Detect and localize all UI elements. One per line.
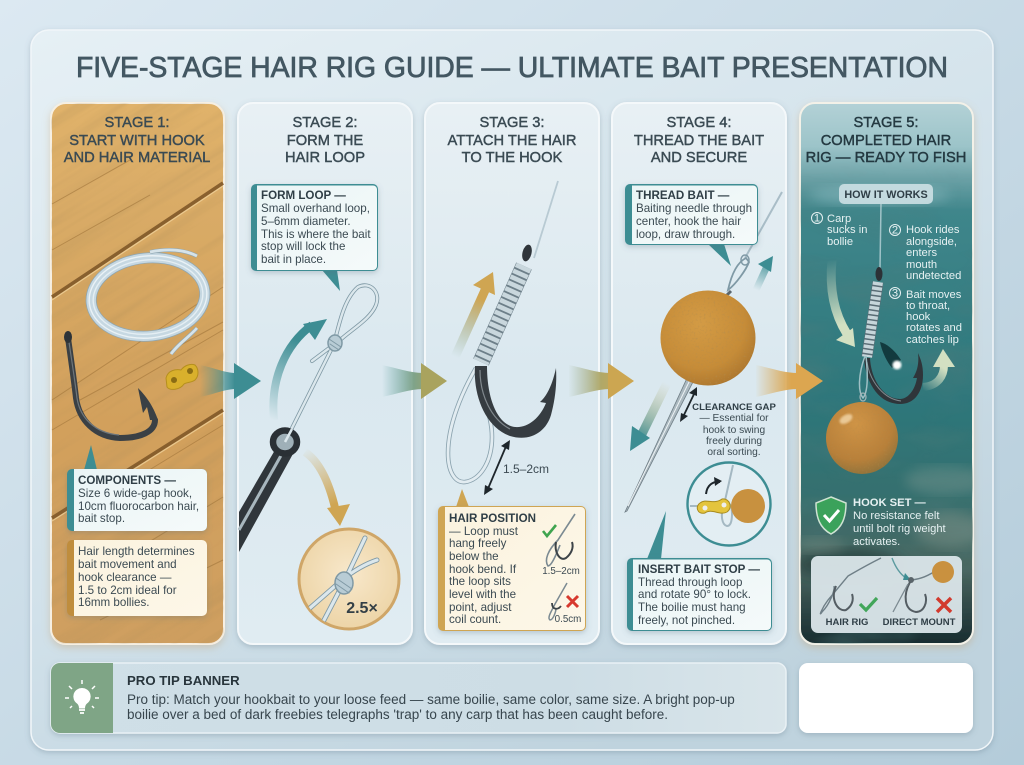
callout: hair position: HAIR POSITION xyxy=(449,512,536,525)
callout: insert bait stop: The boilie must hang xyxy=(638,601,746,614)
measurement: 1.5–2cm xyxy=(484,440,549,495)
title: FIVE-STAGE HAIR RIG GUIDE — ULTIMATE BAIT PRESENTATION xyxy=(76,52,948,84)
icon: fluorocarbon coil xyxy=(85,250,211,354)
blank white box xyxy=(799,663,973,733)
icon: hook shank xyxy=(239,450,294,552)
heading: START WITH HOOK xyxy=(69,133,205,149)
arrow: gold up xyxy=(455,272,495,357)
callout: hair position: hang freely xyxy=(449,537,507,550)
step 3: 3 xyxy=(892,288,898,300)
icon: hair with overhand loop xyxy=(285,285,377,442)
hair with boilie xyxy=(826,356,898,474)
tip text: Pro tip: Match your hookbait to your loose feed — same boilie, same color, same size. A bright pop-up xyxy=(127,692,735,707)
text: hook set: HOOK SET — xyxy=(853,497,927,509)
inset: bait stop detail xyxy=(688,462,770,546)
callout: thread bait: THREAD BAIT — xyxy=(636,189,730,202)
step 3 xyxy=(890,288,962,346)
step 2 xyxy=(890,224,961,282)
step 2: Hook rides xyxy=(906,224,960,236)
note: hair length: 16mm bollies. xyxy=(78,596,150,609)
panel: stage 4 xyxy=(612,103,786,644)
callout: hair position xyxy=(438,489,586,631)
icon: hook xyxy=(64,331,158,438)
heading: STAGE 1: xyxy=(104,115,170,131)
callout: thread bait: center, hook the hair xyxy=(636,215,741,228)
text: hook set: activates. xyxy=(853,536,900,548)
boilie xyxy=(660,290,756,386)
heading: STAGE 4: xyxy=(666,115,732,131)
callout: insert bait stop: Thread through loop xyxy=(638,576,742,589)
text: clearance gap: hook to swing xyxy=(703,425,765,436)
text: clearance gap: CLEARANCE GAP xyxy=(692,402,776,413)
label: how it works xyxy=(839,184,933,204)
callout: form loop: FORM LOOP — xyxy=(261,189,346,202)
callout: insert bait stop xyxy=(627,511,772,631)
icon: rigged hook xyxy=(864,267,923,404)
callout: hair position: coil count. xyxy=(449,613,501,626)
arrow: gold curve xyxy=(305,452,350,526)
heading: AND SECURE xyxy=(651,150,747,166)
arrow: pale right xyxy=(923,349,955,387)
comparison: hair rig xyxy=(820,558,881,628)
text: clearance gap: oral sorting. xyxy=(707,447,761,458)
heading: AND HAIR MATERIAL xyxy=(64,150,210,166)
icon: carp mouth glint xyxy=(880,342,902,370)
arrow: teal up xyxy=(756,256,773,290)
step 2: 2 xyxy=(892,224,898,236)
callout: hair position: point, adjust xyxy=(449,601,512,614)
text: clearance gap: freely during xyxy=(706,436,762,447)
callout: components: Size 6 wide-gap hook, xyxy=(78,487,192,500)
callout: components xyxy=(67,445,207,531)
callout: thread bait: Baiting needle through xyxy=(636,202,752,215)
icon: hook eye xyxy=(273,429,297,454)
step 1 xyxy=(812,212,867,248)
callout: components: COMPONENTS — xyxy=(78,474,176,487)
step 3: to throat, xyxy=(906,300,950,312)
arrow: pale left xyxy=(831,260,855,347)
magnified knot inset xyxy=(299,529,399,629)
callout: thread bait: loop, draw through. xyxy=(636,228,735,241)
hair line xyxy=(534,181,558,258)
heading: STAGE 5: xyxy=(853,115,919,131)
icon: correct position: 1.5–2cm xyxy=(542,566,580,577)
step 3: hook xyxy=(906,311,931,323)
note: hair length: bait movement and xyxy=(78,558,177,571)
callout: components: bait stop. xyxy=(78,512,125,525)
text: hook set: until bolt rig weight xyxy=(853,523,947,535)
heading: FORM THE xyxy=(287,133,363,149)
callout: form loop: 5–6mm diameter. xyxy=(261,215,351,228)
panel: stage 3 xyxy=(425,103,599,644)
comparison: direct mount: DIRECT MOUNT xyxy=(883,617,956,628)
label: how it works: HOW IT WORKS xyxy=(844,189,928,201)
callout: form loop: stop will lock the xyxy=(261,240,345,253)
heading: ATTACH THE HAIR xyxy=(448,133,576,149)
panel: stage 2 xyxy=(238,103,412,644)
icon: shank highlight xyxy=(239,452,283,530)
icon: correct position xyxy=(542,514,580,577)
icon: light bulb xyxy=(65,680,99,713)
hair and loop xyxy=(723,192,782,299)
heading: STAGE 2: xyxy=(292,115,358,131)
step 2: alongside, xyxy=(906,236,957,248)
icon: incorrect position: 0.5cm xyxy=(555,614,581,625)
callout: thread bait xyxy=(625,184,758,266)
measurement: clearance xyxy=(680,387,697,422)
text: hook set: No resistance felt xyxy=(853,510,940,522)
comparison: direct mount xyxy=(883,558,956,628)
heading: PRO TIP BANNER xyxy=(127,673,240,688)
icon: incorrect position xyxy=(549,583,581,625)
measurement: 1.5–2cm: 1.5–2cm xyxy=(503,462,549,476)
arrow: stage 1 to 2 xyxy=(200,363,261,399)
note: hair length: Hair length determines xyxy=(78,545,195,558)
needle xyxy=(625,376,694,512)
callout: components: 10cm fluorocarbon hair, xyxy=(78,500,199,513)
step 1: Carp xyxy=(827,213,851,225)
heading: RIG — READY TO FISH xyxy=(806,150,966,166)
step 3: catches lip xyxy=(906,334,959,346)
heading: STAGE 3: xyxy=(479,115,545,131)
comparison: hair rig: HAIR RIG xyxy=(826,617,868,628)
callout: form loop: bait in place. xyxy=(261,253,326,266)
note: hair length: hook clearance — xyxy=(78,571,172,584)
tip text: boilie over a bed of dark freebies telegraphs 'trap' to any carp that has been caught before. xyxy=(127,707,668,722)
step 1: bollie xyxy=(827,236,853,248)
magnified knot inset: 2.5× xyxy=(346,600,378,617)
note: hair length xyxy=(67,540,207,616)
callout: hair position: level with the xyxy=(449,588,516,601)
callout: hair position: hook bend. If xyxy=(449,563,517,576)
arrow: stage 3 to 4 xyxy=(569,363,634,399)
note: hair length: 1.5 to 2cm ideal for xyxy=(78,584,177,597)
step 3: Bait moves xyxy=(906,289,962,301)
arrow: teal down xyxy=(630,383,667,451)
text: clearance gap: — Essential for xyxy=(699,413,769,424)
step 1: sucks in xyxy=(827,224,867,236)
heading: THREAD THE BAIT xyxy=(634,133,764,149)
callout: form loop: This is where the bait xyxy=(261,228,371,241)
panel: stage 1 xyxy=(46,102,228,652)
hair loop xyxy=(448,368,492,482)
arrow: stage 4 to 5 xyxy=(756,363,823,399)
callout: insert bait stop: INSERT BAIT STOP — xyxy=(638,563,760,576)
heading: COMPLETED HAIR xyxy=(821,133,951,149)
step 2: enters xyxy=(906,247,937,259)
callout: insert bait stop: freely, not pinched. xyxy=(638,614,735,627)
pro tip banner xyxy=(51,663,786,733)
step 3: rotates and xyxy=(906,322,962,334)
icon: bait stop xyxy=(166,364,198,389)
callout: insert bait stop: and rotate 90° to lock. xyxy=(638,588,751,601)
callout: hair position: the loop sits xyxy=(449,575,511,588)
step 2: undetected xyxy=(906,270,961,282)
callout: form loop: Small overhand loop, xyxy=(261,202,370,215)
heading: TO THE HOOK xyxy=(462,150,563,166)
arrow: teal curve xyxy=(273,319,327,420)
arrow: stage 2 to 3 xyxy=(382,363,447,399)
callout: hair position: — Loop must xyxy=(449,525,519,538)
heading: HAIR LOOP xyxy=(285,150,365,166)
line above hook xyxy=(880,204,881,268)
comparison box xyxy=(811,556,962,633)
icon: shield check xyxy=(816,497,846,534)
callout: form loop xyxy=(251,184,378,291)
step 2: mouth xyxy=(906,259,937,271)
step 1: 1 xyxy=(814,212,820,224)
panel: stage 5 xyxy=(795,103,985,644)
icon: hook with whipping xyxy=(475,244,556,438)
callout: hair position: below the xyxy=(449,550,499,563)
